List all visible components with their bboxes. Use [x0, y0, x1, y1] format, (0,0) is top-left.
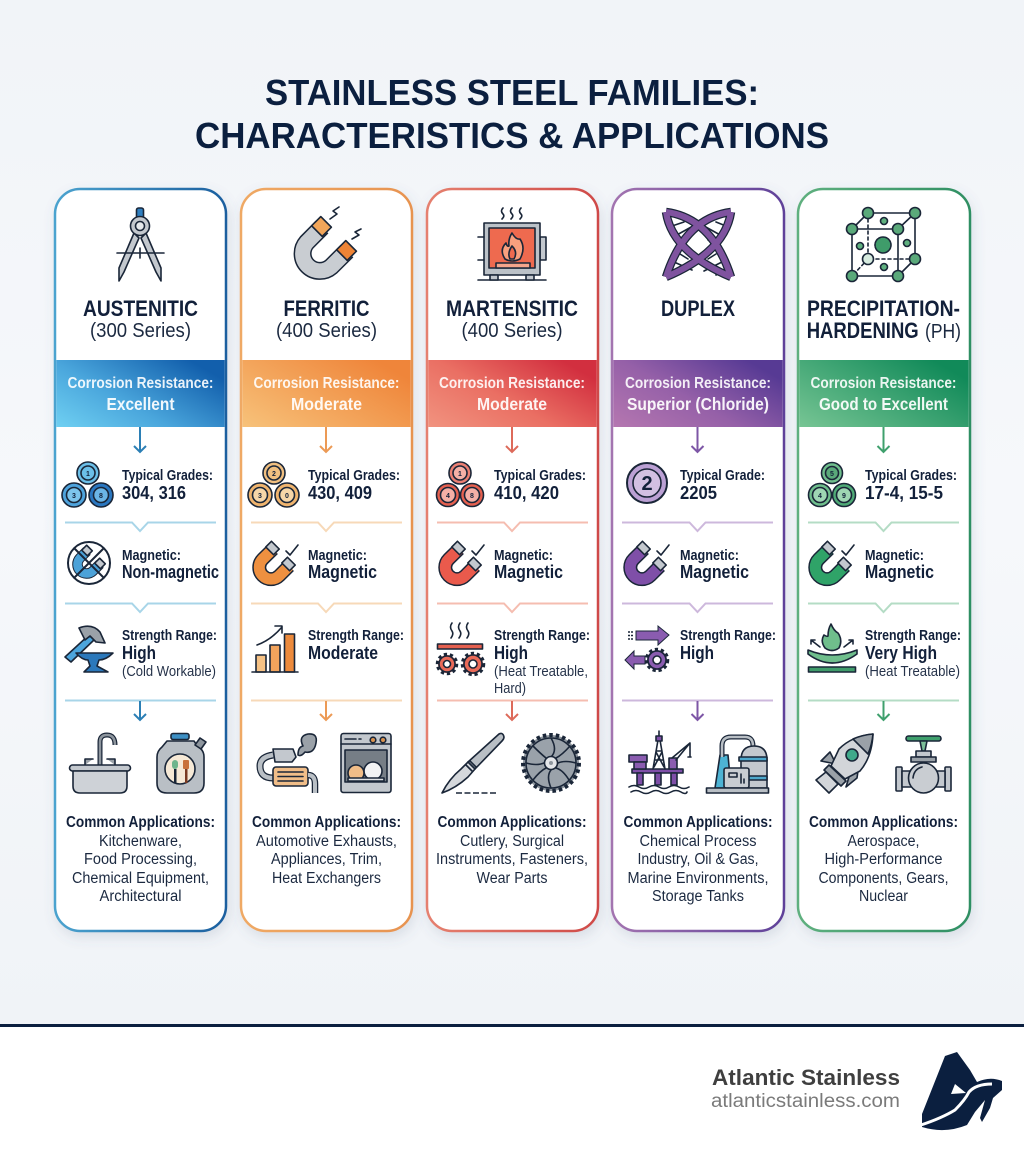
- magnetic text: Non-magnetic: [122, 561, 219, 582]
- heading: MARTENSITIC: [446, 296, 578, 321]
- band: corrosion resistance: Moderate: [291, 394, 362, 414]
- band: corrosion resistance: [56, 360, 225, 427]
- band: corrosion resistance: [799, 360, 969, 427]
- strength text: (Heat Treatable,: [494, 664, 588, 680]
- magnetic text: [680, 548, 749, 582]
- grade text: 2205: [680, 482, 717, 503]
- icon: coins: [436, 462, 484, 506]
- strength text: [494, 628, 590, 697]
- applications text: Industry, Oil & Gas,: [638, 851, 758, 868]
- icon: coins: 0: [285, 493, 289, 500]
- grades text: [308, 468, 400, 503]
- icon: coins: 8: [470, 493, 474, 500]
- strength text: Very High: [865, 642, 937, 663]
- magnetic text: Magnetic:: [308, 548, 367, 564]
- magnetic text: Magnetic: [494, 561, 563, 582]
- strength text: Strength Range:: [122, 628, 217, 644]
- band: corrosion resistance: Corrosion Resistance:: [625, 375, 771, 392]
- grades text: [122, 468, 213, 503]
- magnetic text: Magnetic: [865, 561, 934, 582]
- heading: [446, 296, 578, 342]
- heading: (400 Series): [462, 320, 562, 342]
- icon: coins: 4: [446, 493, 450, 500]
- icon: arrows and gear: [625, 626, 669, 670]
- magnetic text: Magnetic: [308, 561, 377, 582]
- brand text: [711, 1065, 900, 1112]
- applications text: [809, 814, 958, 905]
- applications text: Chemical Equipment,: [72, 870, 209, 887]
- applications text: Common Applications:: [438, 814, 586, 831]
- icon: hammer and anvil: [65, 626, 113, 672]
- panel: duplex: [612, 189, 784, 931]
- strength text: [865, 628, 961, 680]
- magnetic text: [865, 548, 934, 582]
- icon: exhaust: [260, 734, 316, 793]
- logo: [921, 1052, 1002, 1130]
- title: [195, 72, 829, 156]
- grades text: 304, 316: [122, 482, 186, 503]
- applications text: Nuclear: [859, 888, 908, 905]
- applications text: Storage Tanks: [652, 888, 744, 905]
- arrow: [878, 427, 890, 452]
- icon: coins: 3: [72, 493, 76, 500]
- brand text: Atlantic Stainless: [712, 1065, 900, 1090]
- band: corrosion resistance: Moderate: [477, 394, 547, 414]
- icon: magnet: [815, 541, 854, 579]
- arrow: [878, 701, 890, 720]
- grades text: Typical Grades:: [494, 468, 586, 484]
- magnetic text: Magnetic:: [494, 548, 553, 564]
- applications text: [624, 814, 772, 905]
- icon: coins: 9: [842, 493, 846, 500]
- strength text: [122, 628, 217, 680]
- icon: coins: 1: [86, 471, 90, 478]
- arrow: [692, 427, 704, 452]
- strength text: (Cold Workable): [122, 664, 216, 680]
- icon: coins: [808, 462, 856, 506]
- strength text: High: [494, 642, 528, 663]
- grade text: Typical Grade:: [680, 468, 765, 484]
- heading: HARDENING: [807, 318, 919, 343]
- strength text: Strength Range:: [308, 628, 404, 644]
- icon: coins: [62, 462, 113, 507]
- heading: [276, 296, 377, 342]
- grades text: Typical Grades:: [122, 468, 213, 484]
- band: corrosion resistance: Superior (Chloride): [627, 394, 769, 414]
- applications text: Common Applications:: [252, 814, 401, 831]
- icon: coins: 2: [272, 471, 276, 478]
- icon: horseshoe magnet: [303, 207, 361, 271]
- band: corrosion resistance: Corrosion Resistance:: [254, 375, 400, 392]
- applications text: Wear Parts: [476, 870, 548, 887]
- brand text: atlanticstainless.com: [711, 1091, 900, 1112]
- heading: (PH): [925, 321, 961, 343]
- applications text: Food Processing,: [84, 851, 197, 868]
- band: corrosion resistance: [613, 360, 783, 427]
- magnetic text: Magnetic:: [122, 548, 181, 564]
- icon: furnace: [478, 208, 546, 280]
- icon: magnet: [259, 541, 298, 579]
- strength text: (Heat Treatable): [865, 664, 960, 680]
- icon: flame and curved plate: [808, 624, 857, 672]
- applications text: Instruments, Fasteners,: [436, 851, 588, 868]
- icon: oil rig: [629, 731, 691, 794]
- icon: coins: 4: [818, 493, 822, 500]
- footer: [0, 1024, 1024, 1154]
- title: STAINLESS STEEL FAMILIES:: [265, 72, 759, 113]
- heading: (300 Series): [90, 320, 191, 342]
- strength text: Strength Range:: [865, 628, 961, 644]
- icon: coins: 1: [458, 471, 462, 478]
- icon: magnet: [445, 541, 484, 579]
- heading: PRECIPITATION-: [807, 296, 960, 321]
- arrow: [134, 427, 146, 452]
- icon: crystal cube: [846, 208, 920, 282]
- strength text: Hard): [494, 681, 526, 697]
- band: corrosion resistance: Excellent: [106, 394, 175, 414]
- panel: austenitic: [55, 189, 226, 931]
- icon: sink: [70, 735, 130, 793]
- applications text: High-Performance: [824, 851, 942, 868]
- applications text: Common Applications:: [809, 814, 958, 831]
- icon: non-magnetic: [68, 542, 110, 584]
- strength text: High: [122, 642, 156, 663]
- band: corrosion resistance: Corrosion Resistance:: [810, 375, 956, 392]
- strength text: Strength Range:: [680, 628, 776, 644]
- band: corrosion resistance: Good to Excellent: [819, 394, 948, 414]
- heading: AUSTENITIC: [83, 296, 198, 321]
- heading: FERRITIC: [284, 296, 370, 321]
- strength text: Moderate: [308, 642, 378, 663]
- grades text: [865, 468, 957, 503]
- applications text: Automotive Exhausts,: [256, 833, 397, 850]
- magnetic text: [122, 548, 219, 582]
- band: corrosion resistance: [428, 360, 597, 427]
- icon: scalpel: [442, 733, 504, 793]
- arrow: [134, 701, 146, 720]
- icon: coins: 8: [99, 493, 103, 500]
- icon: magnet: [630, 541, 669, 579]
- icon: refinery: [706, 737, 768, 793]
- applications text: Architectural: [100, 888, 182, 905]
- icon: coins: 3: [258, 493, 262, 500]
- arrow: [320, 427, 332, 452]
- applications text: Common Applications:: [66, 814, 215, 831]
- icon: rocket: [816, 734, 873, 793]
- icon: heat and gears: [438, 623, 483, 674]
- applications text: [66, 814, 215, 905]
- applications text: Heat Exchangers: [272, 870, 381, 887]
- grade text: [680, 468, 765, 503]
- icon: drafting compass: [117, 208, 164, 281]
- icon: valve: [896, 736, 951, 793]
- magnetic text: [308, 548, 377, 582]
- panel: ferritic: [241, 189, 412, 931]
- applications text: Components, Gears,: [818, 870, 948, 887]
- grades text: Typical Grades:: [308, 468, 400, 484]
- icon: turbine: [523, 735, 579, 791]
- magnetic text: Magnetic:: [865, 548, 924, 564]
- arrow: [506, 427, 518, 452]
- strength text: High: [680, 642, 714, 663]
- heading: [83, 296, 198, 342]
- grades text: [494, 468, 586, 503]
- strength text: [680, 628, 776, 663]
- band: corrosion resistance: [242, 360, 411, 427]
- icon: food tank: [157, 734, 206, 793]
- grades text: 430, 409: [308, 482, 372, 503]
- arrow: [692, 701, 704, 720]
- applications text: Kitchenware,: [99, 833, 182, 850]
- applications text: Chemical Process: [640, 833, 757, 850]
- icon: coins: [248, 462, 299, 507]
- applications text: Aerospace,: [848, 833, 920, 850]
- applications text: Cutlery, Surgical: [460, 833, 564, 850]
- applications text: [252, 814, 401, 887]
- grades text: 17-4, 15-5: [865, 482, 943, 503]
- heading: [807, 296, 961, 343]
- arrow: [320, 701, 332, 720]
- strength text: [308, 628, 404, 663]
- applications text: Marine Environments,: [628, 870, 768, 887]
- title: CHARACTERISTICS & APPLICATIONS: [195, 115, 829, 156]
- icon: coin: [627, 463, 667, 503]
- magnetic text: Magnetic: [680, 561, 749, 582]
- heading: (400 Series): [276, 320, 377, 342]
- magnetic text: [494, 548, 563, 582]
- strength text: Strength Range:: [494, 628, 590, 644]
- magnetic text: Magnetic:: [680, 548, 739, 564]
- band: corrosion resistance: Corrosion Resistance:: [68, 375, 214, 392]
- icon: dishwasher: [341, 734, 391, 792]
- band: corrosion resistance: Corrosion Resistance:: [439, 375, 585, 392]
- applications text: [436, 814, 588, 887]
- grades text: 410, 420: [494, 482, 559, 503]
- icon: coin: 2: [641, 473, 653, 495]
- arrow: [506, 701, 518, 720]
- heading: DUPLEX: [661, 296, 735, 321]
- grades text: Typical Grades:: [865, 468, 957, 484]
- icon: crossed helix: [666, 212, 731, 277]
- applications text: Appliances, Trim,: [271, 851, 382, 868]
- icon: rising bars: [252, 626, 298, 672]
- applications text: Common Applications:: [624, 814, 772, 831]
- panel: precipitation-hardening: [798, 189, 970, 931]
- icon: coins: 5: [830, 471, 834, 478]
- panel: martensitic: [427, 189, 598, 931]
